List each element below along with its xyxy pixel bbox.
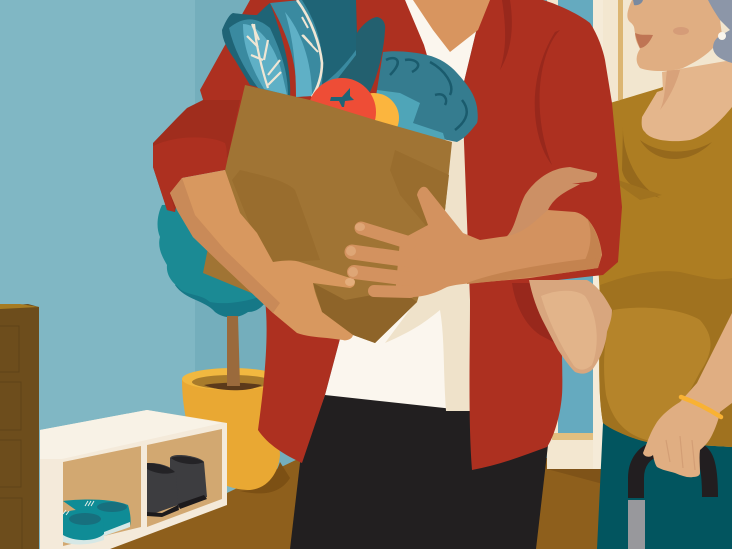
white t-shirt (325, 0, 490, 411)
tree foliage (158, 200, 290, 317)
dark boots (147, 455, 207, 517)
tomato stem (330, 88, 354, 107)
face (627, 0, 722, 71)
left chard leaf (222, 3, 290, 97)
shoe bench (40, 410, 227, 549)
dresser (0, 304, 39, 549)
teal skirt (597, 423, 732, 549)
mustard top (595, 60, 732, 447)
earring (718, 32, 726, 40)
kale (372, 51, 478, 142)
neck skin (413, 0, 490, 52)
orange (349, 93, 399, 143)
walker handle (628, 450, 710, 549)
bracelet (681, 397, 721, 417)
dark leaf (330, 0, 385, 92)
neck and chest (642, 60, 732, 141)
man's right arm and hand (170, 170, 355, 340)
potted tree (158, 200, 290, 493)
grey hair (708, 0, 732, 63)
door frame and window (547, 0, 732, 469)
woman's hand on man's arm (500, 167, 597, 240)
man's left forearm and hand (346, 187, 602, 297)
arm and hand on walker (643, 313, 732, 477)
plant pot (182, 368, 290, 493)
paper bag (203, 85, 452, 343)
tomato (308, 78, 376, 146)
black trousers (290, 395, 548, 549)
groceries (222, 0, 478, 146)
man's clothing (153, 0, 622, 549)
centre chard leaf (270, 0, 356, 97)
woman's arm linked behind the man's arm (529, 280, 612, 374)
woman (595, 0, 732, 549)
teal shoes (63, 500, 131, 544)
trunk (227, 316, 240, 386)
red shirt torso (200, 0, 440, 463)
rolled left sleeve (153, 100, 240, 212)
